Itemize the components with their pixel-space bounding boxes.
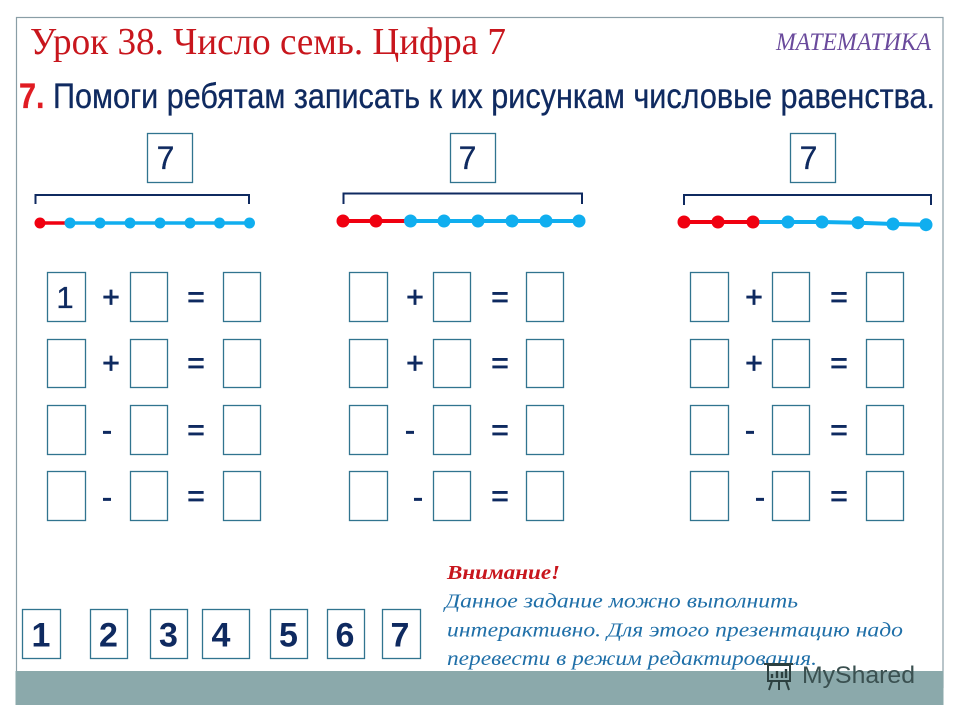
digit cards 1 to 7 [22,610,420,658]
row 3: = [491,414,509,447]
row 1 [350,272,564,322]
total box 7: 7 [459,140,476,176]
row 1: = [187,281,205,314]
row 4: = [187,480,205,513]
card 3: 3 [159,616,178,654]
card 7 [382,610,420,658]
row 3: - [102,414,112,447]
row 3: - [745,414,755,447]
card 6 [328,610,364,658]
row 4: = [491,480,509,513]
row 2 [690,340,904,388]
note heading: Внимание! [446,562,560,584]
row 3 [690,406,904,454]
row 2: = [187,347,205,380]
card 3 [150,610,188,658]
bracket [684,195,931,205]
card 2 [90,610,128,658]
row 3: = [830,414,848,447]
row 4: - [755,481,765,514]
card 1: 1 [32,616,50,654]
title: Урок 38. Число семь. Цифра 7 [30,21,506,63]
card 5: 5 [279,616,298,654]
card 7: 7 [391,616,409,654]
row 2: + [406,347,424,380]
card 5 [270,610,308,658]
row 3: - [405,414,415,447]
column 2: total and number line [336,134,586,228]
row 3 [350,406,564,454]
row 4 [690,472,904,520]
row 2 [350,340,564,388]
card 1 [22,610,60,658]
watermark text: MyShared [802,662,915,689]
row 2: + [102,347,120,380]
total box 7: 7 [800,140,817,176]
note body: интерактивно. Для этого презентацию надо [447,620,903,642]
row 4: = [830,480,848,513]
row 4: - [413,481,423,514]
row 1: + [102,281,120,314]
bracket [344,194,582,204]
total box 7 [148,134,192,182]
equations column 1 [48,272,260,520]
number line: 1 red, 6 blue [34,218,255,228]
row 3: = [187,414,205,447]
row 4 [350,472,564,520]
total box 7 [450,134,496,182]
total box 7: 7 [157,140,174,176]
note body [443,590,903,670]
bracket [36,195,249,204]
row 1: = [491,281,509,314]
icon: presentation board [764,664,793,690]
row 3 [48,406,260,454]
equations column 3 [690,272,904,520]
footer bar [16,671,944,705]
watermark [764,662,915,690]
note body: Данное задание можно выполнить [443,590,798,612]
row 4 [48,472,260,520]
row 1: = [830,281,848,314]
number line: 3 red, 5 blue [678,216,932,231]
row 1 [690,272,904,322]
row 1 [48,272,260,322]
row 1: + [745,281,763,314]
number line: 2 red, 5 blue [336,214,586,228]
note body: перевести в режим редактирования. [447,648,817,670]
subject label: МАТЕМАТИКА [775,29,932,56]
total box 7 [790,134,836,182]
card 4 [202,610,250,658]
column 3: total and number line [678,134,932,231]
row 4: - [102,481,112,514]
attention note [443,562,903,670]
row 1: + [406,281,424,314]
card 2: 2 [99,616,118,654]
row 2: + [745,347,763,380]
row 2 [48,340,260,388]
equations column 2 [350,272,564,520]
card 6: 6 [336,616,354,654]
row 2: = [830,347,848,380]
row 2: = [491,347,509,380]
row 1: 1 [56,280,74,315]
card 4: 4 [212,616,231,654]
column 1: total and number line [34,134,255,228]
